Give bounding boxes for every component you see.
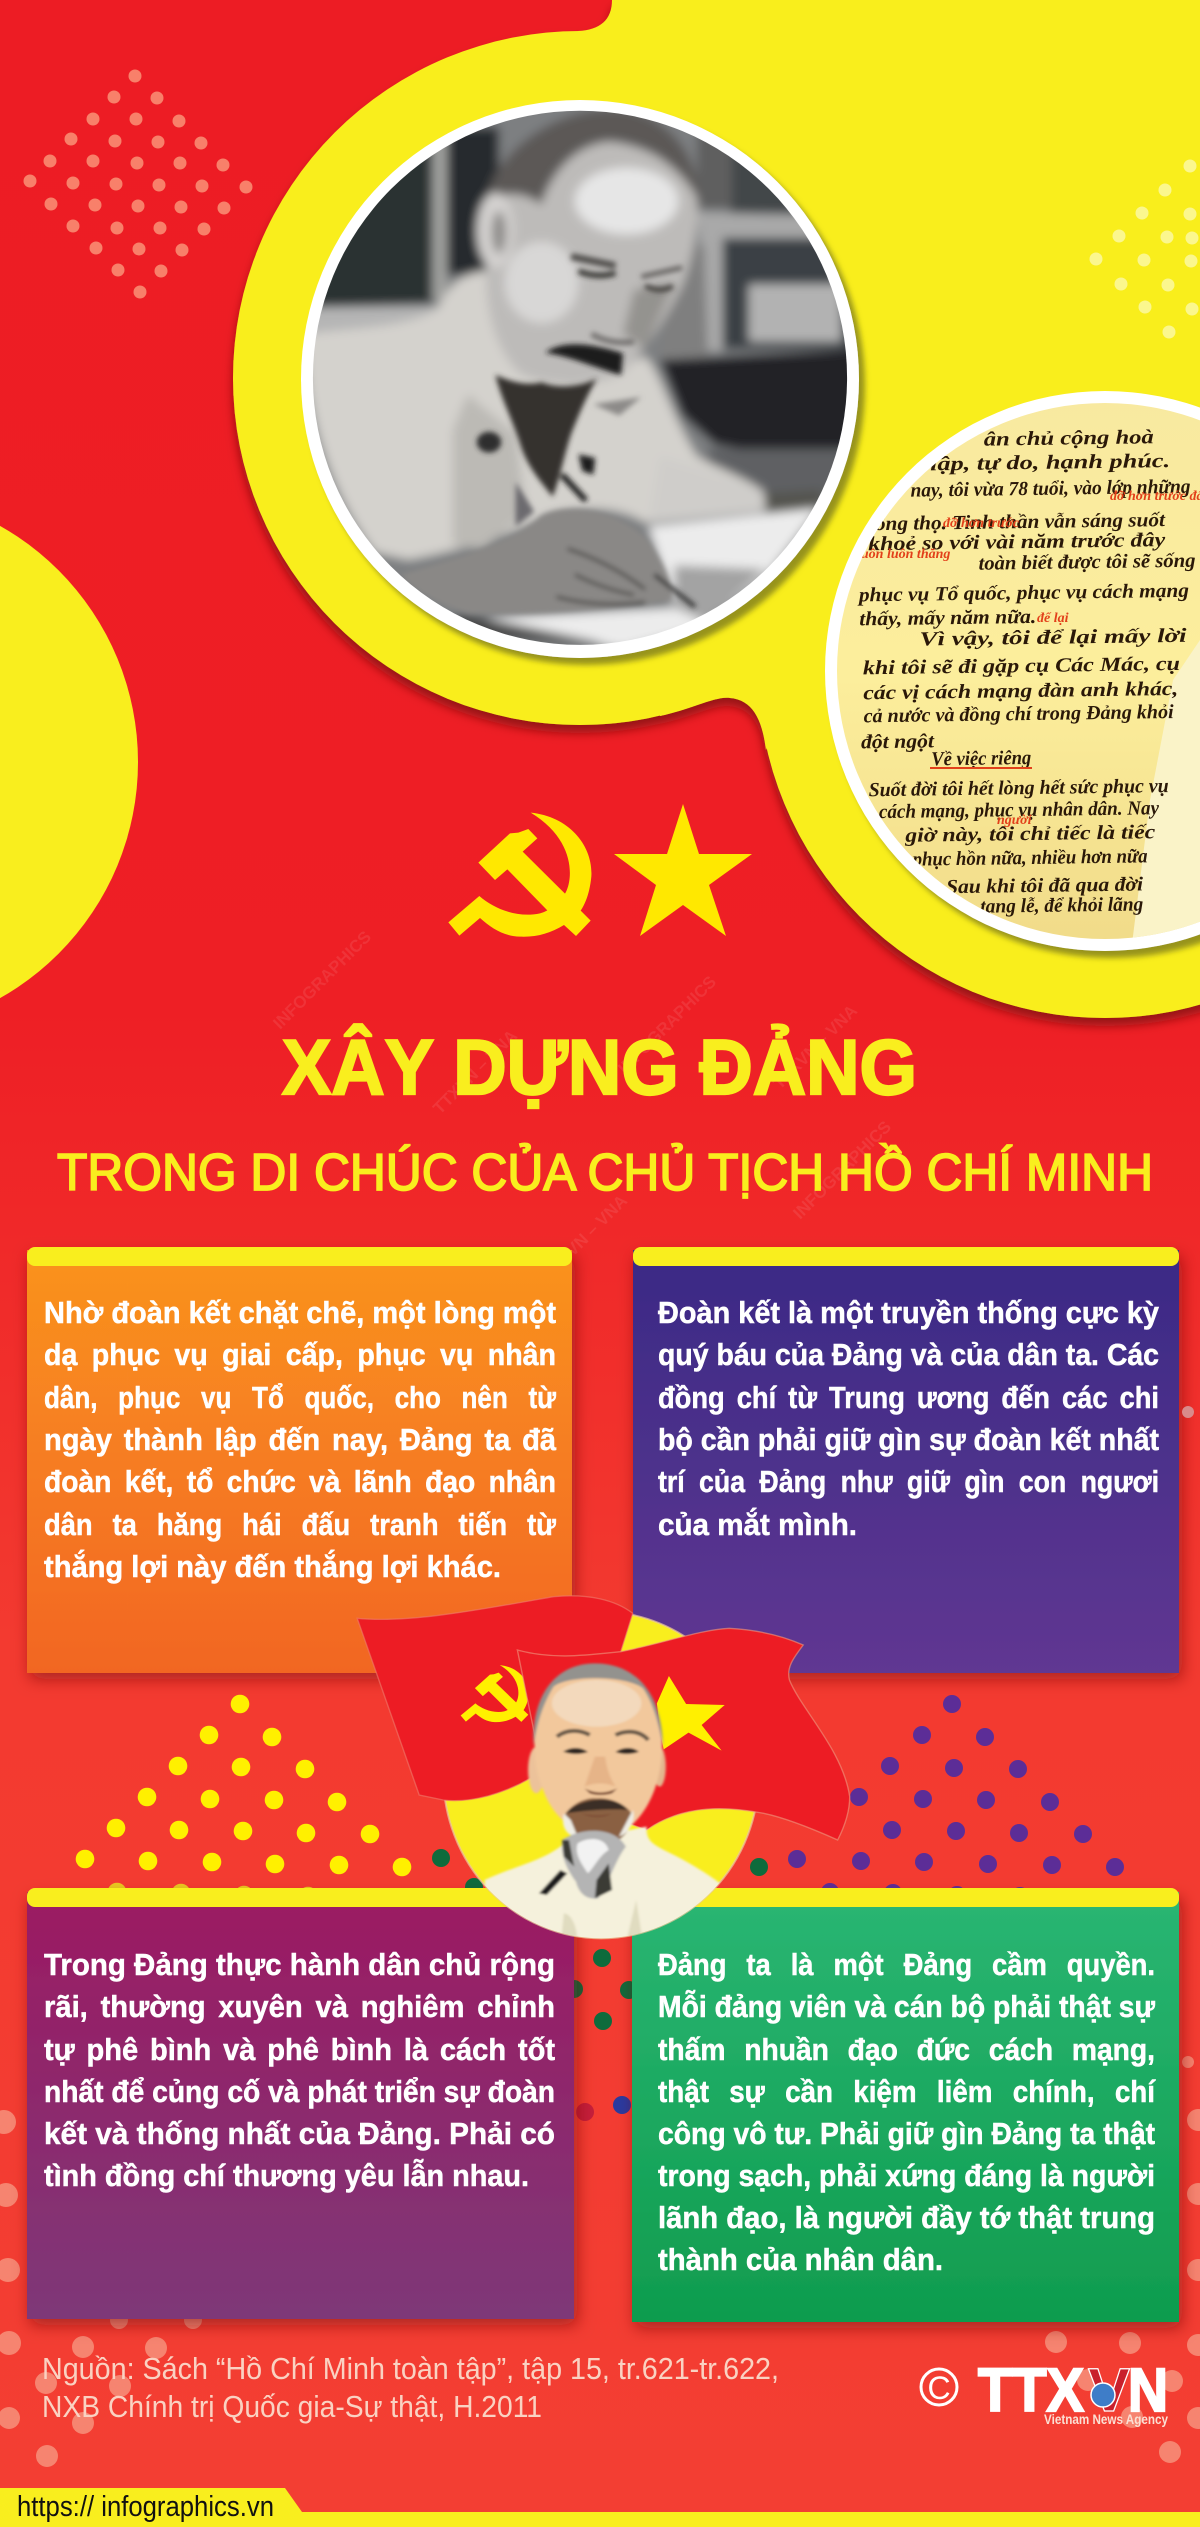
photo: handwritten testament manuscript: lập, tự do, hạnh phúc. <box>930 450 1170 475</box>
panel: purple quote <box>633 1247 1179 1673</box>
panel: green quote: công vô tư. Phải giữ gìn Đảng ta thật <box>658 2116 1155 2151</box>
footer bar with URL: https:// infographics.vn <box>17 2491 274 2523</box>
panel: orange quote: dân, phục vụ Tổ quốc, cho nên từ <box>44 1380 556 1415</box>
photo: handwritten testament manuscript: giờ này, tôi chỉ tiếc là tiếc <box>904 821 1156 847</box>
panel: green quote: trong sạch, phải xứng đáng là người <box>658 2158 1155 2193</box>
photo: handwritten testament manuscript: khoẻ so với vài năm trước đây <box>868 529 1165 555</box>
photo: handwritten testament manuscript: thấy, mấy năm nữa. <box>859 606 1036 630</box>
panel: green quote: thành của nhân dân. <box>658 2242 943 2277</box>
watermarks: INFOGRAPHICS <box>789 1117 895 1223</box>
dots: green and blue accents <box>432 1849 768 2121</box>
panel: orange quote: dân ta hăng hái đấu tranh tiến từ <box>44 1507 556 1542</box>
watermarks: TTXVN – VNA <box>769 1001 861 1093</box>
photo: handwritten testament manuscript: Về việc riêng <box>931 747 1031 770</box>
photo: handwritten testament manuscript: phục vụ Tổ quốc, phục vụ cách mạng <box>857 580 1189 606</box>
panel: orange quote: thắng lợi này đến thắng lợi khác. <box>44 1548 501 1584</box>
photo: handwritten testament manuscript: nay, tôi vừa 78 tuổi, vào lớp những <box>910 476 1191 502</box>
photo: handwritten testament manuscript: đỡ hơn trước <box>943 516 1020 531</box>
photo: handwritten testament manuscript: đột ngột <box>861 730 936 753</box>
photo: handwritten testament manuscript: cả nước và đồng chí trong Đảng khỏi <box>863 701 1174 727</box>
photo: handwritten testament manuscript: phục hồn nữa, nhiều hơn nữa <box>911 845 1148 871</box>
panel: plum quote: tình đồng chí thương yêu lẫn nhau. <box>44 2158 529 2193</box>
source text: NXB Chính trị Quốc gia-Sự thật, H.2011 <box>42 2389 542 2424</box>
photo: handwritten testament manuscript: Suốt đời tôi hết lòng hết sức phục vụ <box>869 775 1169 801</box>
panel: green quote <box>632 1888 1179 2322</box>
panel: orange quote: đoàn kết, tổ chức và lãnh đạo nhân <box>44 1464 556 1499</box>
icon: hammer and sickle <box>448 813 591 937</box>
panel: orange quote <box>27 1247 572 1673</box>
panel: purple quote: quý báu của Đảng và của dân ta. Các <box>658 1337 1159 1372</box>
watermarks: INFOGRAPHICS <box>614 972 720 1078</box>
yellow circle: left edge <box>0 491 138 1033</box>
photo: handwritten testament manuscript: người <box>997 813 1032 828</box>
photo: handwritten testament manuscript <box>820 390 1200 960</box>
photo: handwritten testament manuscript: khi tôi sẽ đi gặp cụ Các Mác, cụ <box>863 653 1180 679</box>
panel: orange quote: dạ phục vụ giai cấp, phục vụ nhân <box>44 1337 556 1372</box>
photo: handwritten testament manuscript: ân chủ cộng hoà <box>984 426 1154 451</box>
watermarks <box>269 927 895 1283</box>
central portrait with flags <box>357 1596 850 1947</box>
panel: green quote: Mỗi đảng viên và cán bộ phải thật sự <box>658 1989 1155 2024</box>
logo: TTXVN: V <box>1088 2356 1130 2424</box>
photo: handwritten testament manuscript: toàn biết được tôi sẽ sống <box>978 550 1196 575</box>
panel: plum quote: Trong Đảng thực hành dân chủ rộng <box>44 1947 555 1982</box>
party flag <box>357 1596 633 1801</box>
panel: plum quote: tự phê bình và phê bình là cách tốt <box>44 2032 555 2067</box>
panel: plum quote: rãi, thường xuyên và nghiêm chỉnh <box>44 1989 555 2024</box>
panel: plum quote: nhất để củng cố và phát triển sự đoàn <box>44 2074 555 2109</box>
dots: top-left pattern <box>24 70 252 298</box>
photo: handwritten testament manuscript: luôn luôn thăng <box>857 547 950 562</box>
panel: orange quote: Nhờ đoàn kết chặt chẽ, một lòng một <box>44 1295 556 1330</box>
logo: TTXVN: C <box>927 2370 951 2406</box>
photo: handwritten testament manuscript: Vì vậy, tôi để lại mấy lời <box>919 625 1187 651</box>
photo: Ho Chi Minh writing <box>290 90 870 670</box>
watermarks: TTXVN – VNA <box>429 1026 521 1118</box>
panel: green quote: thấm nhuần đạo đức cách mạng, <box>658 2032 1155 2067</box>
portrait <box>485 1663 722 1947</box>
source text <box>42 2351 779 2424</box>
icon: yellow star <box>614 804 752 936</box>
photo: handwritten testament manuscript: các vị cách mạng đàn anh khác, <box>863 678 1178 704</box>
yellow blob behind photos <box>233 0 1200 1018</box>
photo: handwritten testament manuscript: Sau khi tôi đã qua đời <box>946 873 1144 898</box>
logo: TTXVN <box>921 2356 1168 2427</box>
panel: plum quote: kết và thống nhất của Đảng. Phải có <box>44 2116 555 2151</box>
dots: top-right pattern <box>1090 160 1198 338</box>
photo: handwritten testament manuscript: cách mạng, phục vụ nhân dân. Nay <box>879 797 1159 823</box>
dots: yellow triangle <box>76 1695 411 1905</box>
panel: purple quote: của mắt mình. <box>658 1506 857 1542</box>
photo: handwritten testament manuscript: tang lễ, để khỏi lãng <box>980 893 1143 918</box>
photo: handwritten testament manuscript: ông thọ. Tinh thần vẫn sáng suốt <box>875 509 1167 535</box>
panel: purple quote: Đoàn kết là một truyền thống cực kỳ <box>658 1295 1160 1330</box>
logo: TTXVN: N <box>1128 2356 1168 2424</box>
national flag star <box>657 1676 725 1751</box>
panel: purple quote: bộ cần phải giữ gìn sự đoàn kết nhất <box>658 1422 1159 1457</box>
dots: pale pink scatter <box>0 1406 1200 2467</box>
panel: green quote: lãnh đạo, là người đầy tớ thật trung <box>658 2200 1155 2235</box>
subtitle: TRONG DI CHÚC CỦA CHỦ TỊCH HỒ CHÍ MINH <box>57 1143 1153 1202</box>
panel: orange quote: ngày thành lập đến nay, Đảng ta đã <box>44 1422 557 1457</box>
party flag emblem <box>461 1665 529 1722</box>
photo: handwritten testament manuscript: để lại <box>1037 611 1069 626</box>
footer bar with URL <box>0 2488 1200 2527</box>
watermarks: TTXVN – VNA <box>539 1191 631 1283</box>
logo: TTXVN: Vietnam News Agency <box>1044 2412 1168 2427</box>
source text: Nguồn: Sách “Hồ Chí Minh toàn tập”, tập 15, tr.621-tr.622, <box>42 2351 779 2386</box>
national flag <box>517 1628 850 1840</box>
panel: plum quote <box>27 1888 574 2319</box>
logo: TTXVN: TTX <box>978 2356 1084 2424</box>
dots: purple triangle <box>788 1695 1124 1905</box>
panel: green quote: thật sự cần kiệm liêm chính, chí <box>658 2074 1156 2109</box>
title: main heading: XÂY DỰNG ĐẢNG <box>282 1023 917 1111</box>
watermarks: INFOGRAPHICS <box>269 927 375 1033</box>
yellow disc <box>443 1612 759 1938</box>
